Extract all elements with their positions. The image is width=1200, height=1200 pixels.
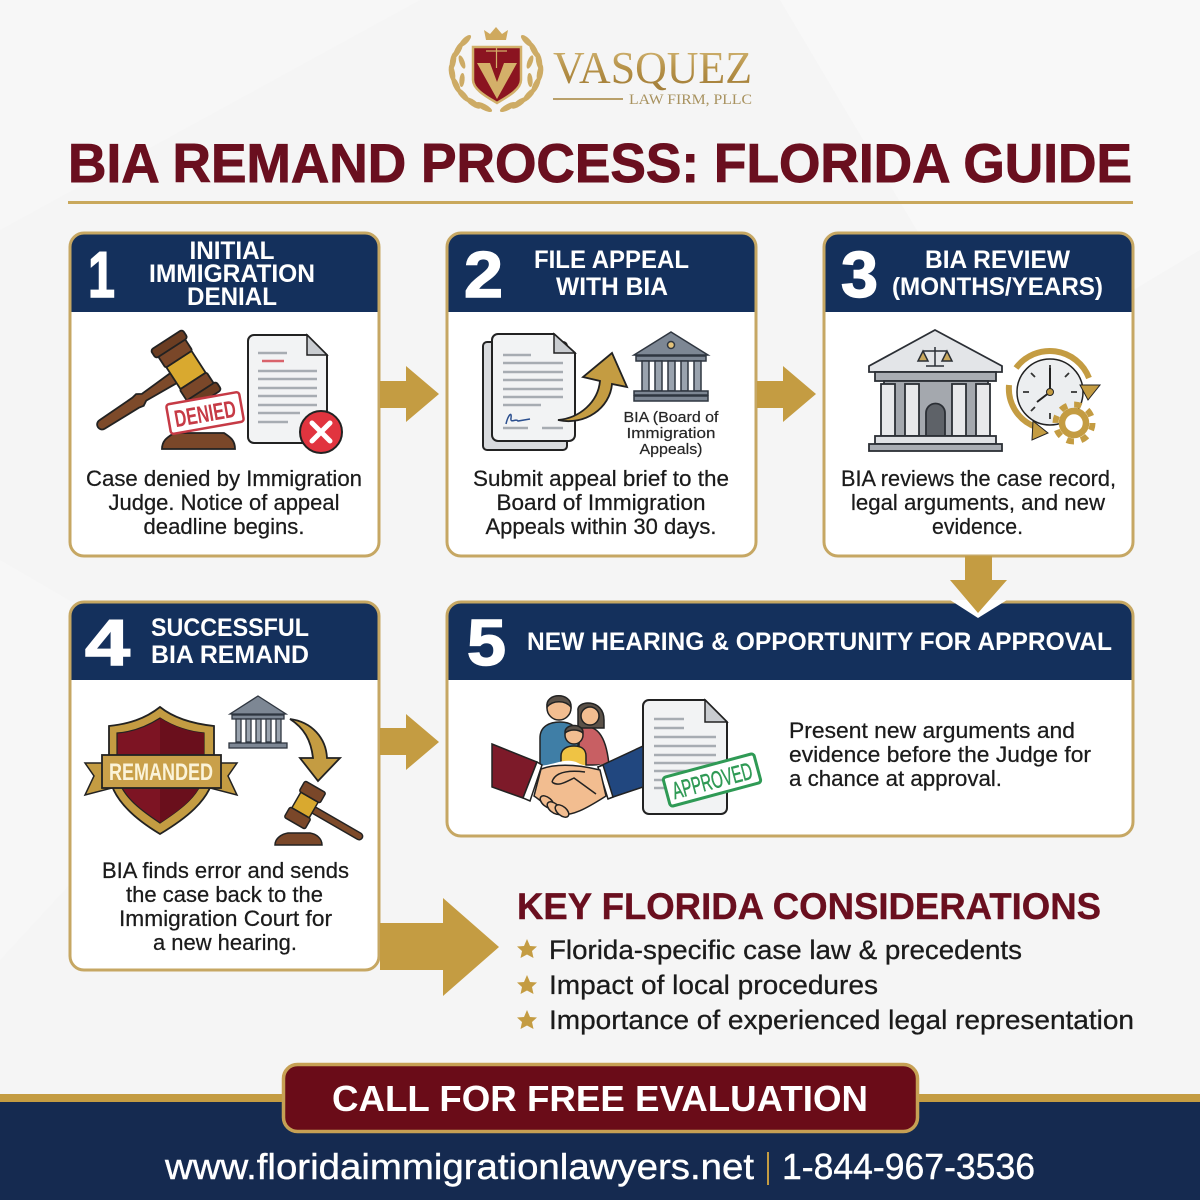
- icon: family: [540, 696, 609, 768]
- icon: shield: [473, 47, 521, 103]
- arrow: step 4 to step 5: [380, 714, 439, 770]
- step 3 description: [841, 466, 1116, 539]
- step 2 number: 2: [464, 238, 503, 311]
- step 3 heading: BIA REVIEW: [925, 246, 1070, 274]
- step 4 heading: BIA REMAND: [151, 641, 309, 669]
- icon: signed documents: [483, 334, 575, 450]
- heading: key Florida considerations: KEY FLORIDA CONSIDERATIONS: [517, 886, 1101, 927]
- icon: crown: [484, 27, 508, 40]
- icon: remanded shield: [85, 707, 237, 834]
- title: BIA REMAND PROCESS: FLORIDA GUIDE: [68, 132, 1132, 194]
- panel: step 3: [824, 233, 1133, 556]
- arrow: step 2 to step 3: [757, 366, 816, 422]
- icon: approved document: [643, 700, 761, 814]
- consideration 3: Importance of experienced legal representation: [549, 1005, 1134, 1035]
- step 3 description: evidence.: [932, 514, 1023, 539]
- step 5 description: [789, 718, 1091, 791]
- footer phone: 1-844-967-3536: [782, 1146, 1035, 1187]
- step 1 number: 1: [88, 238, 115, 311]
- arrow: step 4 to key considerations: [380, 898, 499, 996]
- step 3 description: legal arguments, and new: [851, 490, 1105, 515]
- step 2 heading: [534, 246, 689, 301]
- step 3 number: 3: [841, 238, 878, 311]
- star bullet 1: [517, 939, 537, 958]
- star bullet 2: [517, 975, 537, 994]
- icon: small gavel: [275, 781, 373, 856]
- arrow: step 1 to step 2: [380, 366, 439, 422]
- icon: approved document: APPROVED: [669, 758, 755, 805]
- step 3 heading: [892, 246, 1103, 301]
- footer website: www.floridaimmigrationlawyers.net: [164, 1146, 754, 1187]
- step 4 description: BIA finds error and sends: [102, 858, 349, 883]
- icon: handshake: [492, 744, 643, 820]
- icon: gavel with denied stamp: DENIED: [172, 396, 238, 433]
- footer band: [0, 1094, 1200, 1200]
- icon: curved gold arrow: [558, 353, 627, 421]
- step 5 description: evidence before the Judge for: [789, 742, 1091, 767]
- step 4 description: [102, 858, 349, 955]
- step 4 description: a new hearing.: [153, 930, 297, 955]
- logo: Vasquez Law Firm: [447, 27, 752, 114]
- step 4 description: the case back to the: [126, 882, 323, 907]
- step 5 heading: NEW HEARING & OPPORTUNITY FOR APPROVAL: [527, 628, 1112, 656]
- step 5 description: a chance at approval.: [789, 766, 1002, 791]
- step 1 heading: INITIAL: [190, 237, 274, 265]
- step 1 description: Judge. Notice of appeal: [108, 490, 340, 515]
- step 4 heading: [151, 614, 309, 669]
- step 3 description: BIA reviews the case record,: [841, 466, 1116, 491]
- icon label: BIA: BIA (Board of: [624, 409, 719, 426]
- step 4 description: Immigration Court for: [119, 906, 332, 931]
- logo wordmark: VASQUEZ: [553, 42, 752, 93]
- arrow: step 3 to step 5: [950, 556, 1007, 618]
- icon label: BIA: Immigration: [626, 425, 716, 442]
- panel: step 4: [70, 602, 379, 970]
- icon: remanded shield: REMANDED: [109, 759, 213, 786]
- step 2 description: Board of Immigration: [496, 490, 706, 515]
- step 1 heading: DENIAL: [187, 283, 277, 311]
- icon: small courthouse: [229, 696, 287, 748]
- step 2 description: Submit appeal brief to the: [473, 466, 729, 491]
- step 4 heading: SUCCESSFUL: [151, 614, 309, 642]
- step 2 description: Appeals within 30 days.: [486, 514, 716, 539]
- icon: courthouse with scales: [869, 330, 1002, 451]
- step 5 description: Present new arguments and: [789, 718, 1075, 743]
- icon: clock with gear: [1009, 351, 1100, 442]
- call to action button: CALL FOR FREE EVALUATION: [332, 1078, 868, 1119]
- step 1 heading: [149, 237, 315, 311]
- panel: step 5: [447, 602, 1133, 836]
- step 1 description: Case denied by Immigration: [86, 466, 362, 491]
- step 4 number: 4: [85, 606, 130, 679]
- step 3 heading: (MONTHS/YEARS): [892, 273, 1103, 301]
- call to action button: [284, 1064, 918, 1132]
- icon: document with red x: [248, 335, 342, 453]
- logo subtitle: LAW FIRM, PLLC: [629, 92, 752, 108]
- step 2 heading: WITH BIA: [556, 273, 668, 301]
- step 5 number: 5: [467, 606, 506, 679]
- list: considerations: [517, 935, 1134, 1035]
- step 1 description: deadline begins.: [144, 514, 304, 539]
- step 2 description: [473, 466, 729, 539]
- icon label: BIA: [624, 409, 719, 458]
- step 1 description: [86, 466, 362, 539]
- icon: small courthouse: [634, 332, 708, 401]
- panel: step 2: [447, 233, 756, 556]
- icon: gavel with denied stamp: [78, 329, 244, 457]
- icon label: BIA: Appeals): [640, 441, 703, 458]
- icon: laurel wreath: [447, 33, 545, 114]
- icon: curved down arrow: [290, 719, 340, 781]
- star bullet 3: [517, 1010, 537, 1029]
- step 1 heading: IMMIGRATION: [149, 260, 315, 288]
- consideration 2: Impact of local procedures: [549, 970, 878, 1000]
- consideration 1: Florida-specific case law & precedents: [549, 935, 1022, 965]
- panel: step 1: [70, 233, 379, 556]
- step 2 heading: FILE APPEAL: [534, 246, 689, 274]
